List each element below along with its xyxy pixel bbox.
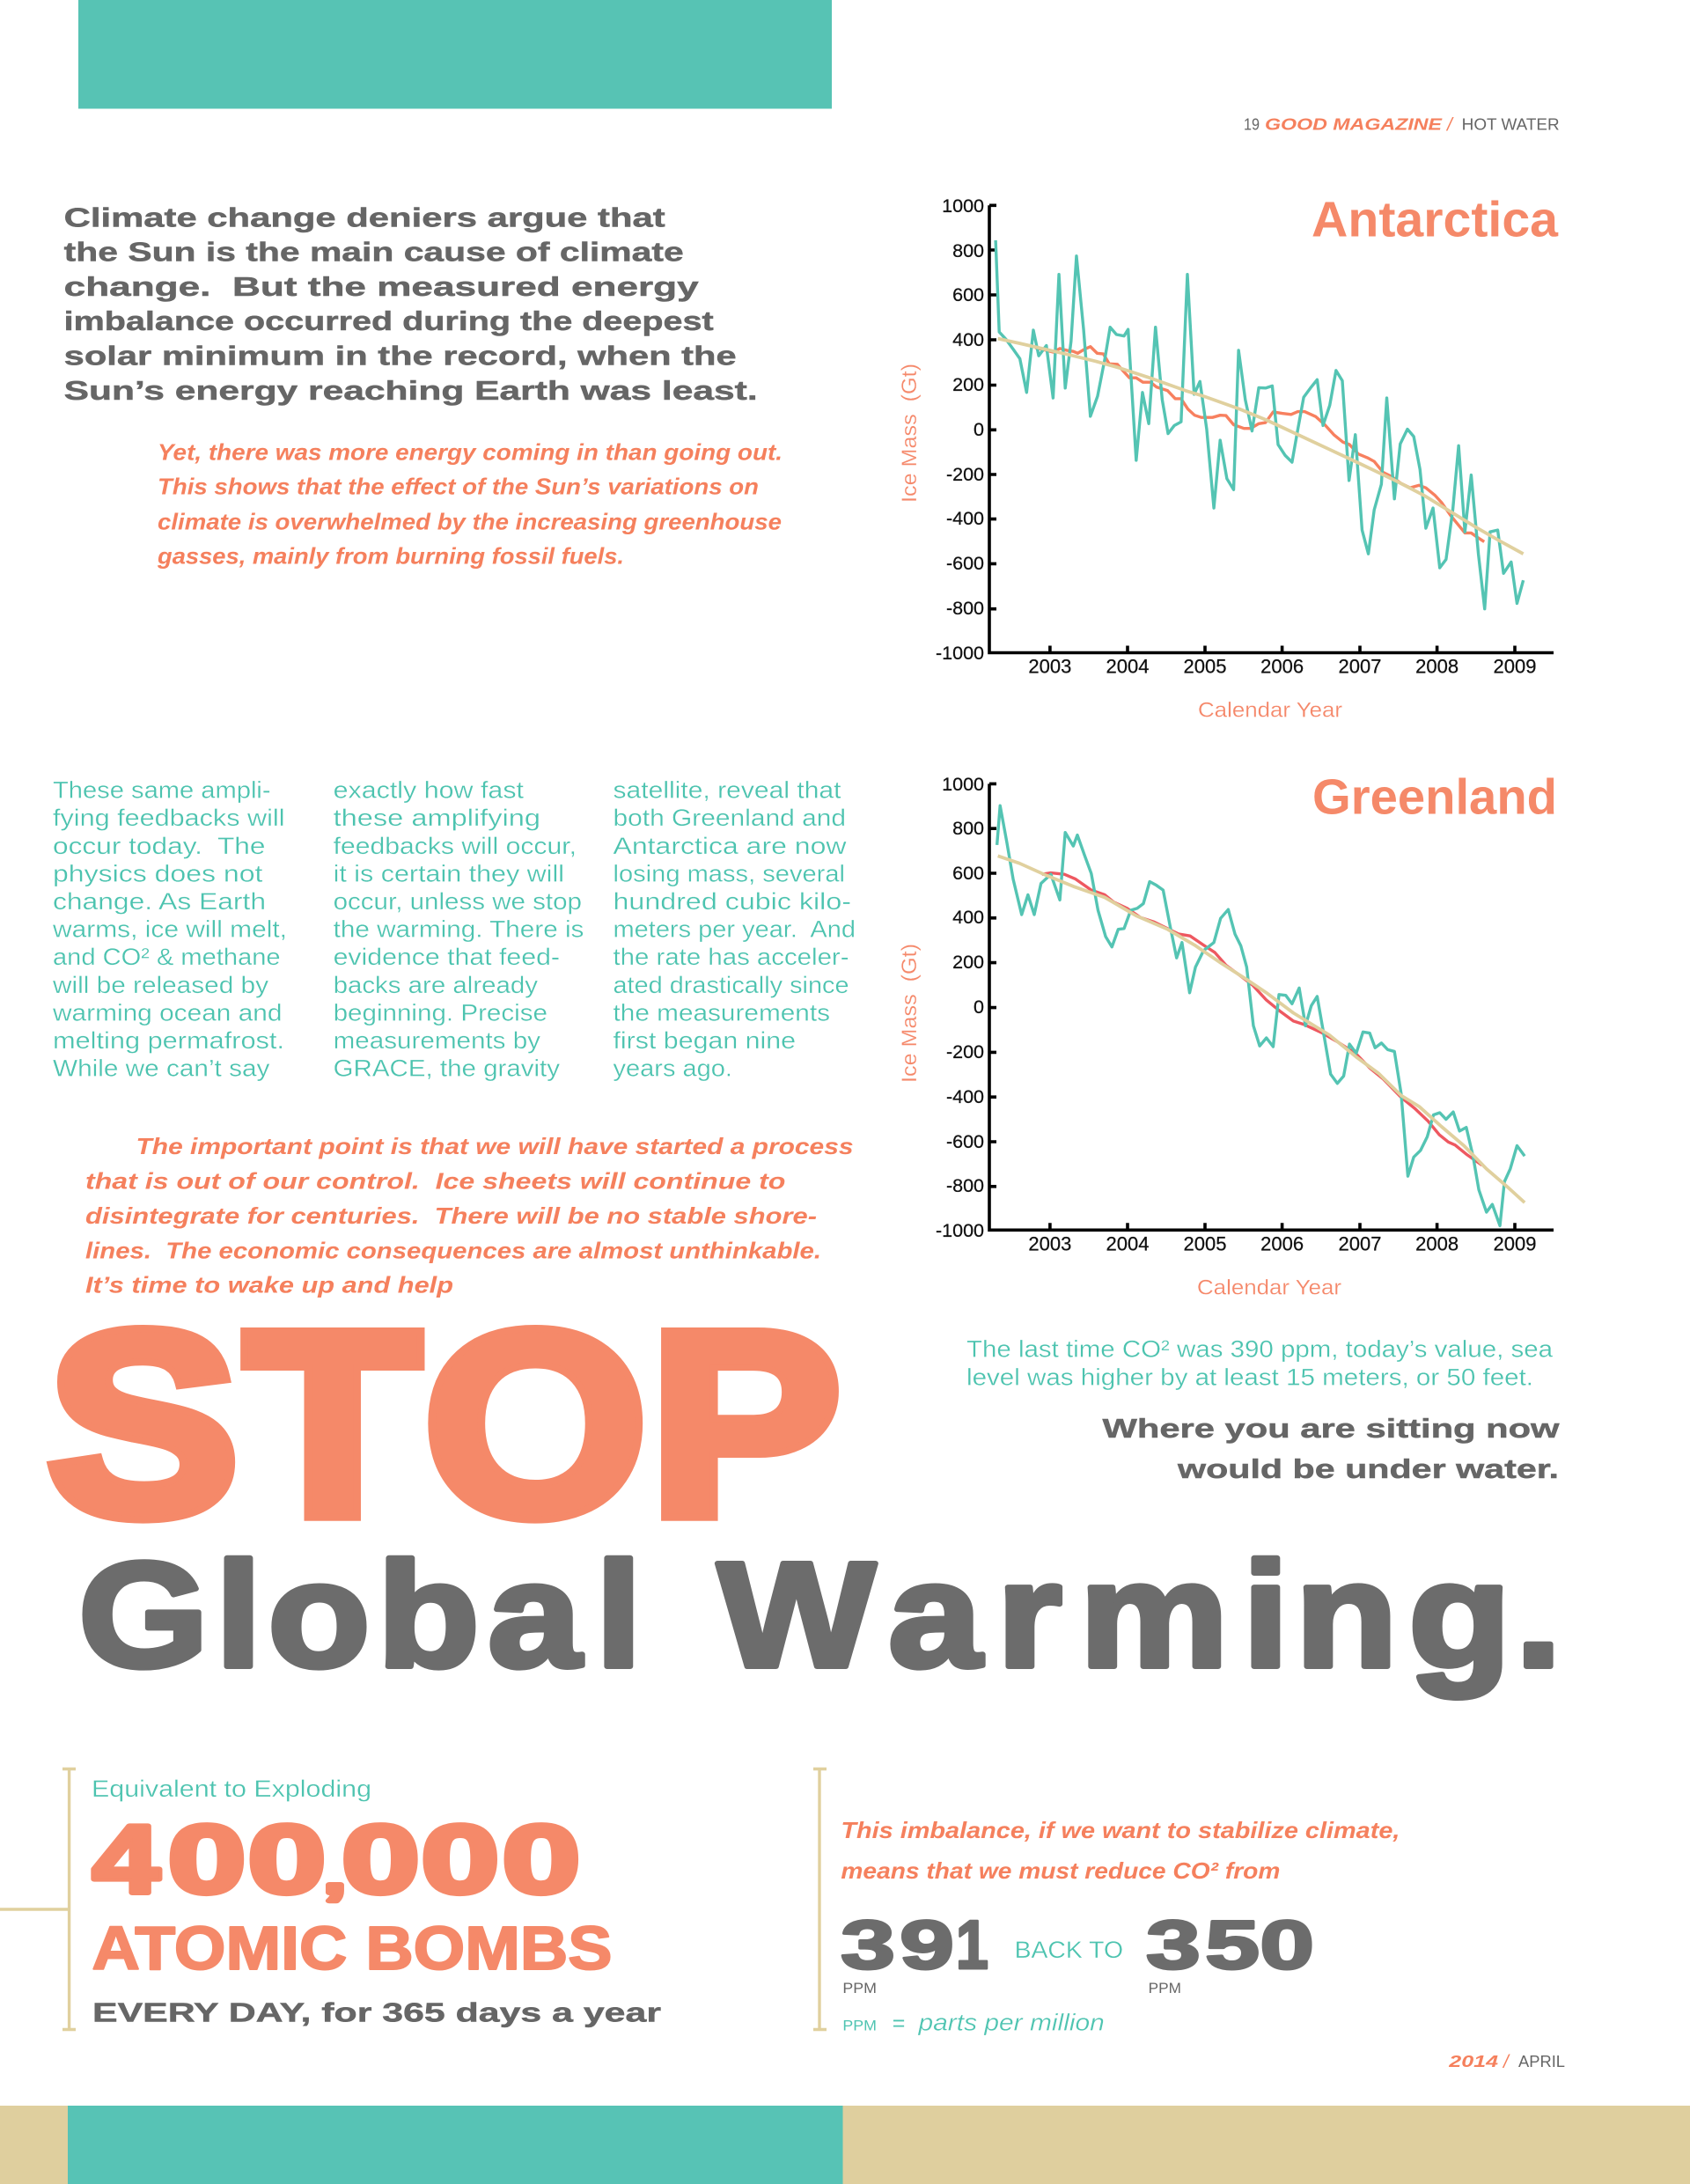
chart: Antarctica bbox=[898, 192, 1559, 722]
ppm definition: = bbox=[893, 2011, 905, 2036]
stat: 391 ppm: 1 bbox=[956, 1907, 988, 1983]
intro statement: the Sun is the main cause of climate bbox=[64, 237, 684, 268]
stat: 391 ppm: PPM bbox=[842, 1980, 877, 1996]
axis title: calendar year: Calendar Year bbox=[1197, 1276, 1341, 1299]
column 1: warming ocean and bbox=[52, 999, 282, 1026]
panel: atomic bombs bbox=[0, 1768, 661, 2031]
column 1: These same ampli- bbox=[53, 777, 271, 804]
column 3: both Greenland and bbox=[613, 805, 846, 831]
orange callout: important point: lines. The economic consequences are almost unthinkable. bbox=[85, 1238, 821, 1264]
orange callout: important point: It’s time to wake up and help bbox=[85, 1271, 453, 1298]
x-axis years: 2008 bbox=[1415, 655, 1459, 678]
under water statement bbox=[1102, 1413, 1561, 1484]
y-axis numbers: 400 bbox=[952, 907, 984, 928]
page footer date bbox=[1448, 2052, 1565, 2072]
column 3: meters per year. And bbox=[613, 916, 856, 943]
orange callout: energy: gasses, mainly from burning fossil fuels. bbox=[157, 543, 624, 570]
column 1: melting permafrost. bbox=[53, 1027, 284, 1054]
column 1: change. As Earth bbox=[53, 888, 266, 915]
column 2: occur, unless we stop bbox=[334, 888, 582, 915]
headline: Global Warming: Global Warming. bbox=[78, 1532, 1561, 1699]
column 2: evidence that feed- bbox=[334, 944, 560, 970]
x-axis years: 2008 bbox=[1415, 1232, 1459, 1254]
column 1 bbox=[52, 777, 287, 1082]
orange statement: means that we must reduce CO² from bbox=[841, 1857, 1280, 1884]
stat: 400,000: , bbox=[324, 1844, 345, 1904]
column 2: these amplifying bbox=[334, 805, 540, 831]
three-column body text bbox=[52, 777, 856, 1082]
stat: 350 ppm: 350 bbox=[1146, 1907, 1314, 1983]
ppm definition bbox=[842, 2010, 1105, 2036]
y-axis numbers: 200 bbox=[952, 952, 984, 973]
ppm definition: PPM bbox=[842, 2018, 877, 2034]
page header: GOOD MAGAZINE bbox=[1265, 116, 1443, 134]
column 1: fying feedbacks will bbox=[53, 805, 285, 831]
stat: 400,000: 4 bbox=[92, 1805, 159, 1914]
y-axis numbers: -600 bbox=[946, 553, 984, 574]
column 3 bbox=[613, 777, 856, 1082]
x-axis years bbox=[1028, 1232, 1536, 1254]
ppm definition: parts per million bbox=[917, 2010, 1105, 2036]
y-axis numbers bbox=[936, 774, 984, 1241]
y-axis numbers: 200 bbox=[952, 374, 984, 395]
column 3: ated drastically since bbox=[613, 972, 849, 998]
y-axis numbers: -200 bbox=[946, 464, 984, 485]
y-axis numbers: 800 bbox=[952, 240, 984, 261]
orange callout: energy: climate is overwhelmed by the increasing greenhouse bbox=[158, 509, 782, 535]
x-axis years: 2003 bbox=[1028, 655, 1071, 678]
x-axis years: 2004 bbox=[1106, 655, 1149, 678]
column 2: GRACE, the gravity bbox=[334, 1055, 561, 1082]
y-axis numbers bbox=[936, 195, 984, 664]
intro statement bbox=[64, 202, 758, 406]
column 2: the warming. There is bbox=[334, 916, 584, 943]
column 2: beginning. Precise bbox=[334, 999, 547, 1026]
x-axis years: 2004 bbox=[1106, 1232, 1149, 1254]
stat: 350 ppm: PPM bbox=[1149, 1980, 1181, 1996]
y-axis numbers: 0 bbox=[974, 996, 984, 1018]
page footer date: 2014 bbox=[1448, 2053, 1498, 2070]
orange callout: energy bbox=[157, 439, 783, 570]
column 2: backs are already bbox=[334, 972, 539, 998]
x-axis years bbox=[1028, 655, 1536, 678]
y-axis numbers: -400 bbox=[946, 1086, 984, 1107]
axis title: calendar year: Calendar Year bbox=[1198, 699, 1342, 722]
intro statement: Sun’s energy reaching Earth was least. bbox=[64, 375, 758, 406]
x-axis years: 2003 bbox=[1028, 1232, 1071, 1254]
x-axis years: 2007 bbox=[1339, 1232, 1381, 1254]
label: back to: BACK TO bbox=[1015, 1937, 1123, 1963]
column 3: losing mass, several bbox=[613, 860, 845, 886]
orange callout: important point: disintegrate for centuries. There will be no stable shore- bbox=[85, 1202, 817, 1229]
y-axis numbers: -800 bbox=[946, 1175, 984, 1196]
sea level note: The last time CO² was 390 ppm, today’s value, sea bbox=[966, 1336, 1554, 1363]
column 3: the measurements bbox=[613, 999, 830, 1026]
y-axis numbers: 1000 bbox=[942, 774, 984, 795]
column 3: the rate has acceler- bbox=[613, 944, 849, 970]
column 2: measurements by bbox=[334, 1027, 541, 1054]
sea level note bbox=[966, 1336, 1554, 1390]
chart: Greenland bbox=[898, 769, 1557, 1299]
label: equivalent: Equivalent to Exploding bbox=[92, 1776, 371, 1802]
orange callout: energy: Yet, there was more energy coming in than going out. bbox=[158, 439, 783, 466]
orange callout: important point: The important point is that we will have started a process bbox=[136, 1133, 853, 1159]
y-axis numbers: 600 bbox=[952, 863, 984, 884]
column 1: warms, ice will melt, bbox=[52, 916, 287, 943]
headline: STOP: STOP bbox=[48, 1277, 841, 1569]
column 3: hundred cubic kilo- bbox=[613, 888, 851, 915]
column 2: it is certain they will bbox=[334, 860, 564, 886]
y-axis numbers: -800 bbox=[946, 598, 984, 619]
y-axis numbers: 400 bbox=[952, 329, 984, 350]
label: every day: EVERY DAY, for 365 days a year bbox=[92, 1997, 661, 2028]
page footer date: / bbox=[1502, 2052, 1510, 2072]
page header bbox=[1244, 114, 1560, 136]
page header: / bbox=[1445, 114, 1454, 136]
column 2: exactly how fast bbox=[334, 777, 525, 804]
orange callout: important point: that is out of our control. Ice sheets will continue to bbox=[85, 1167, 786, 1194]
intro statement: solar minimum in the record, when the bbox=[64, 340, 737, 371]
y-axis numbers: -600 bbox=[946, 1131, 984, 1152]
sea level note: level was higher by at least 15 meters, or 50 feet. bbox=[966, 1364, 1533, 1390]
data lines bbox=[996, 240, 1524, 609]
column 3: first began nine bbox=[613, 1027, 796, 1054]
bracket: right bbox=[813, 1768, 827, 2031]
x-axis years: 2009 bbox=[1494, 1232, 1536, 1254]
stat: 400,000 bbox=[92, 1805, 580, 1914]
column 1: physics does not bbox=[53, 860, 263, 886]
y-axis numbers: -200 bbox=[946, 1041, 984, 1063]
x-axis years: 2006 bbox=[1260, 655, 1304, 678]
axis title: ice mass: Ice Mass (Gt) bbox=[898, 364, 922, 503]
bottom band bbox=[0, 2106, 1690, 2184]
stat: 400,000: 00 bbox=[168, 1805, 326, 1914]
x-axis years: 2006 bbox=[1260, 1232, 1304, 1254]
x-axis years: 2005 bbox=[1184, 655, 1226, 678]
column 2 bbox=[334, 777, 584, 1082]
y-axis numbers: 0 bbox=[974, 419, 984, 440]
x-axis years: 2007 bbox=[1339, 655, 1381, 678]
stat: 400,000: 000 bbox=[342, 1805, 580, 1914]
column 2: feedbacks will occur, bbox=[334, 833, 577, 859]
stat: 391 ppm bbox=[841, 1907, 988, 1996]
data lines bbox=[997, 805, 1525, 1225]
page header: HOT WATER bbox=[1462, 116, 1560, 134]
column 3: satellite, reveal that bbox=[613, 777, 841, 804]
chart title: Greenland: Greenland bbox=[1312, 769, 1557, 826]
label: atomic bombs: ATOMIC BOMBS bbox=[92, 1914, 613, 1982]
under water statement: would be under water. bbox=[1177, 1453, 1559, 1484]
chart title: Antarctica: Antarctica bbox=[1312, 192, 1559, 248]
top teal bar bbox=[78, 0, 832, 109]
axis title: ice mass: Ice Mass (Gt) bbox=[898, 944, 922, 1083]
page header: 19 bbox=[1244, 116, 1260, 134]
bracket: left bbox=[0, 1768, 76, 2031]
stat: 391 ppm: 39 bbox=[841, 1907, 954, 1983]
y-axis numbers: -1000 bbox=[936, 1220, 984, 1241]
intro statement: imbalance occurred during the deepest bbox=[64, 305, 714, 336]
y-axis numbers: -400 bbox=[946, 508, 984, 529]
column 1: and CO² & methane bbox=[53, 944, 281, 970]
intro statement: change. But the measured energy bbox=[64, 271, 700, 302]
column 1: will be released by bbox=[52, 972, 269, 998]
y-axis numbers: 1000 bbox=[942, 195, 984, 217]
axes bbox=[989, 205, 1554, 653]
x-axis years: 2005 bbox=[1184, 1232, 1226, 1254]
orange statement bbox=[841, 1817, 1400, 1884]
orange callout: important point bbox=[85, 1133, 853, 1298]
panel: reduce CO2 bbox=[813, 1768, 1400, 2036]
axes bbox=[989, 783, 1554, 1230]
column 1: occur today. The bbox=[53, 833, 266, 859]
y-axis numbers: 600 bbox=[952, 284, 984, 305]
under water statement: Where you are sitting now bbox=[1102, 1413, 1561, 1444]
column 3: Antarctica are now bbox=[613, 833, 847, 859]
x-axis years: 2009 bbox=[1494, 655, 1536, 678]
column 1: While we can’t say bbox=[53, 1055, 270, 1082]
column 3: years ago. bbox=[613, 1055, 732, 1082]
intro statement: Climate change deniers argue that bbox=[64, 202, 665, 232]
y-axis numbers: -1000 bbox=[936, 643, 984, 664]
page footer date: APRIL bbox=[1518, 2053, 1565, 2070]
y-axis numbers: 800 bbox=[952, 818, 984, 839]
orange statement: This imbalance, if we want to stabilize climate, bbox=[841, 1817, 1400, 1843]
orange callout: energy: This shows that the effect of the Sun’s variations on bbox=[158, 474, 759, 500]
